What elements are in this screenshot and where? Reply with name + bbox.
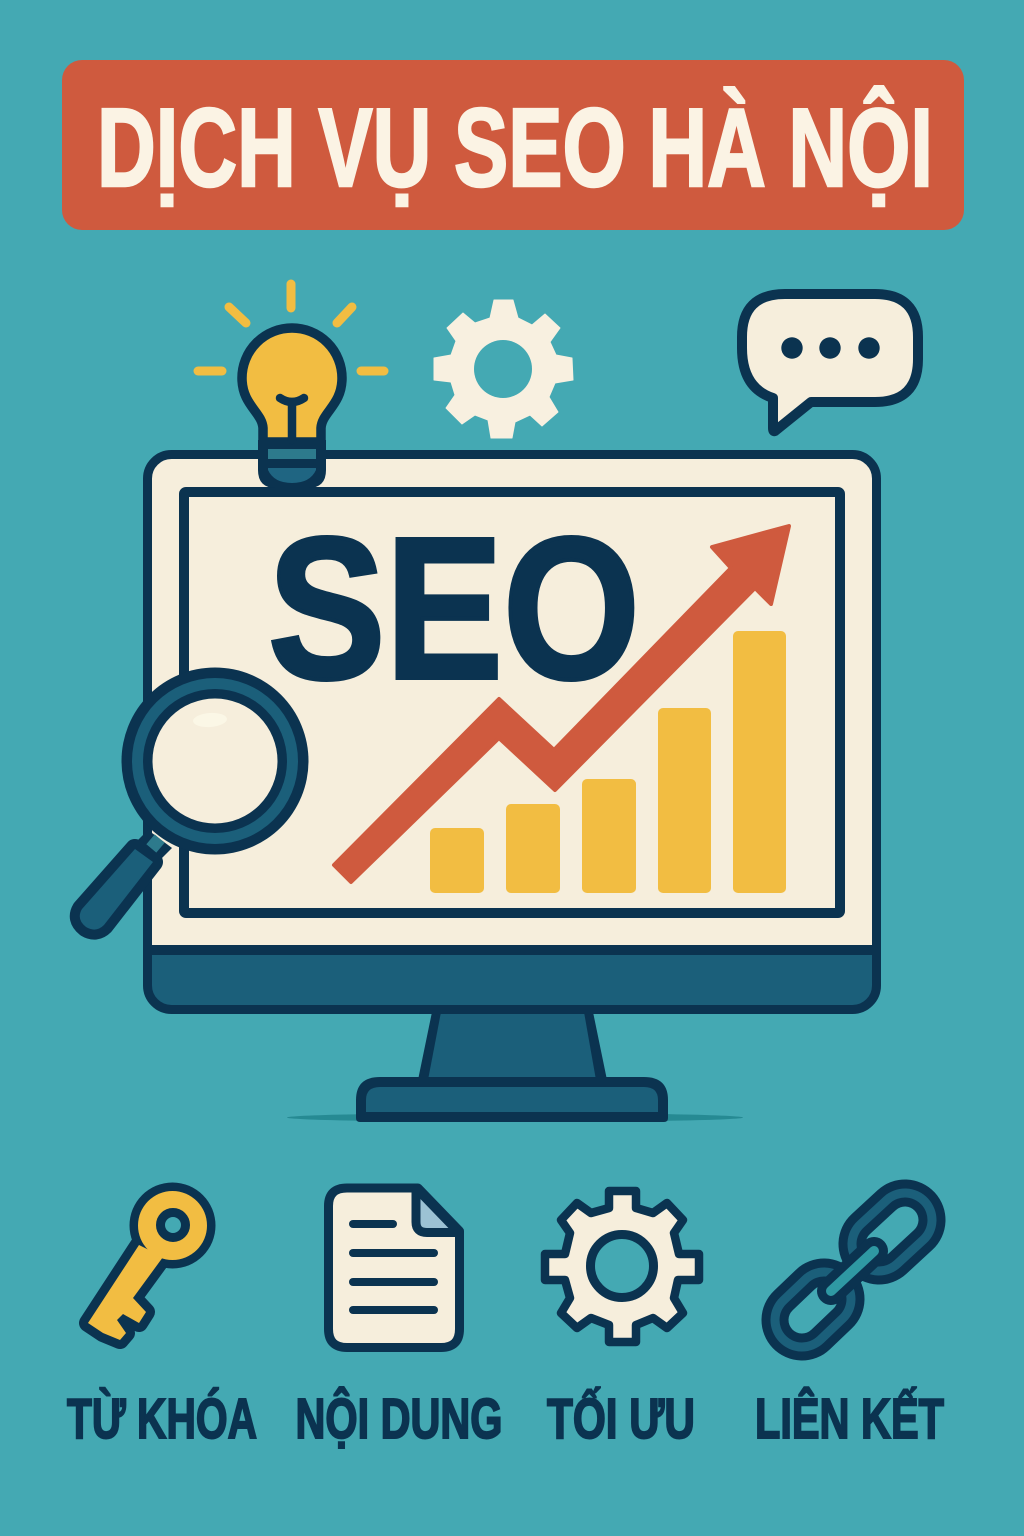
title banner xyxy=(62,60,964,230)
trend arrow xyxy=(334,526,789,882)
label: TỐI ƯU xyxy=(547,1386,695,1451)
feature: nội dung xyxy=(296,1188,502,1451)
icon: magnifying glass xyxy=(80,668,308,930)
feature: liên kết xyxy=(755,1220,944,1451)
icon: gear xyxy=(545,1191,699,1342)
feature: tối ưu xyxy=(545,1191,699,1451)
bar chart xyxy=(430,631,786,893)
icon: chain link xyxy=(802,1220,905,1320)
icon: document xyxy=(328,1188,460,1348)
label: NỘI DUNG xyxy=(296,1386,502,1451)
SEO text: SEO xyxy=(268,495,640,721)
label: LIÊN KẾT xyxy=(755,1386,944,1451)
icon: key xyxy=(88,1182,216,1340)
label: TỪ KHÓA xyxy=(67,1387,257,1451)
monitor body xyxy=(148,454,876,1010)
monitor xyxy=(148,454,876,1122)
icon: gear top xyxy=(434,300,573,438)
icon: light bulb xyxy=(198,284,384,488)
feature: từ khóa xyxy=(67,1182,257,1451)
monitor stand xyxy=(287,1012,743,1122)
monitor screen xyxy=(184,492,840,913)
icon: speech bubble xyxy=(742,294,918,431)
